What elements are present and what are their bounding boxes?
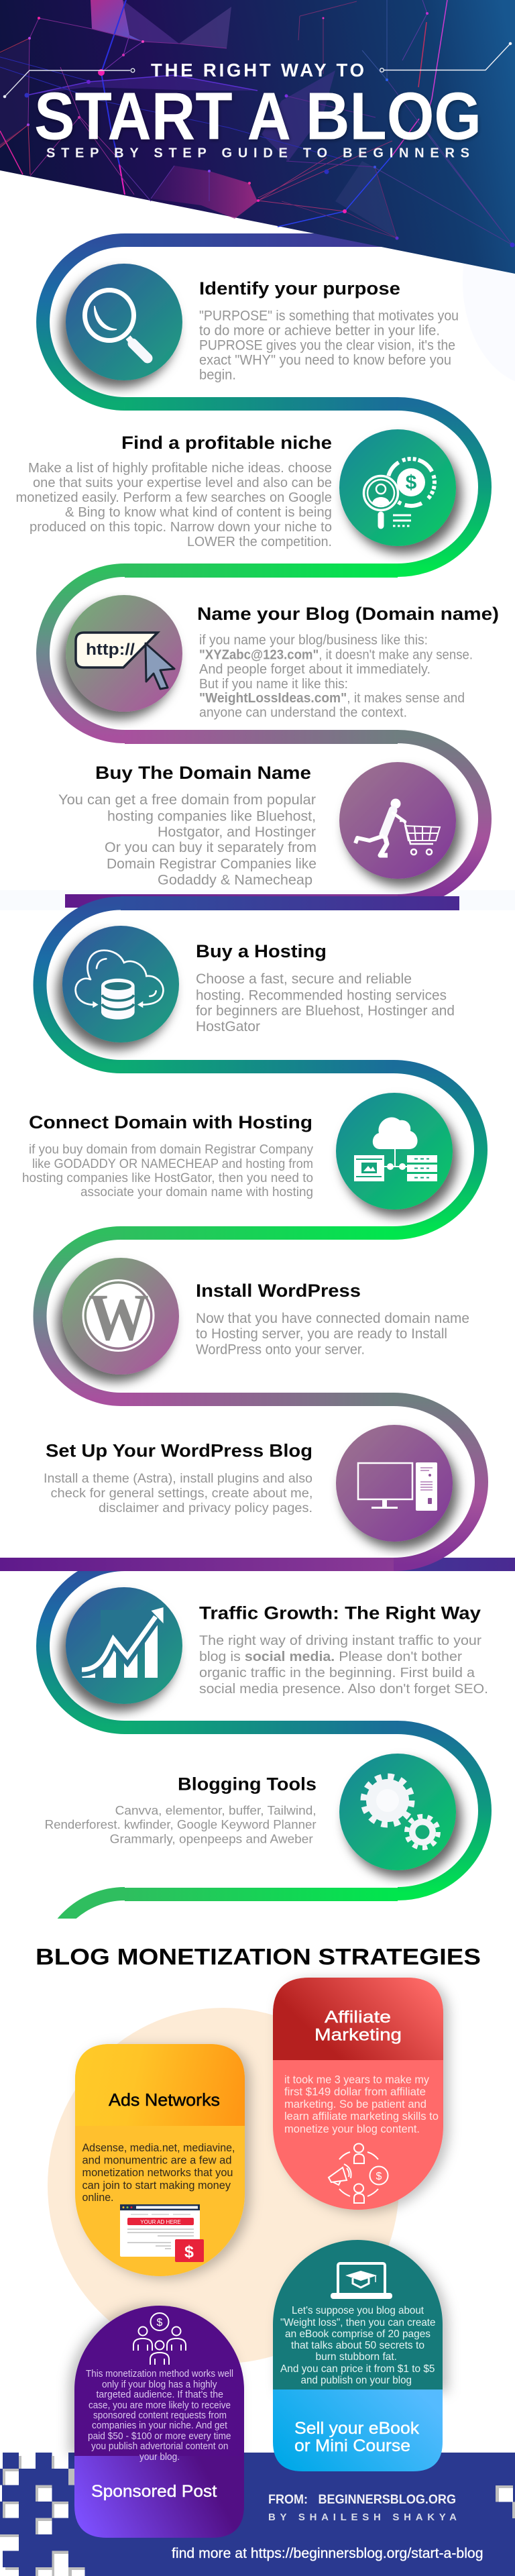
card text: that talks about 50 secrets to xyxy=(291,2340,424,2351)
card: sponsored post xyxy=(74,2306,244,2538)
icon: cloud database xyxy=(62,926,179,1042)
step 4: buy the domain name xyxy=(58,762,456,888)
timeline path: section three xyxy=(36,1558,515,1919)
heading: Find a profitable niche xyxy=(121,433,332,453)
step 1: identify your purpose xyxy=(66,264,459,382)
body text xyxy=(199,309,459,382)
body text: "WeightLossIdeas.com", it makes sense and xyxy=(199,691,465,706)
body text xyxy=(22,1143,313,1199)
body text: PUPROSE gives you the clear vision, it's the xyxy=(199,338,455,353)
icon: web ad xyxy=(120,2204,204,2262)
card title: Affiliate xyxy=(325,2008,391,2027)
heading: Blogging Tools xyxy=(178,1774,317,1794)
step 5: buy a hosting xyxy=(62,926,455,1042)
body text: Canvva, elementor, buffer, Tailwind, xyxy=(115,1804,317,1817)
icon: sponsored people xyxy=(133,2313,186,2365)
icon: laptop course xyxy=(331,2263,392,2299)
pixel pattern xyxy=(0,2469,515,2576)
body text: to do more or achieve better in your life. xyxy=(199,323,440,338)
card text: monetize your blog content. xyxy=(284,2123,420,2135)
network polygons xyxy=(0,0,397,238)
icon: sponsored people: $ xyxy=(157,2317,163,2328)
footer credit xyxy=(268,2493,457,2523)
card text: your blog. xyxy=(139,2451,180,2463)
footer link: find more at https://beginnersblog.org/start-a-blog xyxy=(172,2546,483,2561)
icon: growth chart xyxy=(66,1587,182,1704)
body text xyxy=(199,633,473,720)
card text: targeted audience. If that's the xyxy=(97,2389,223,2400)
heading: Set Up Your WordPress Blog xyxy=(46,1441,312,1461)
body text: begin. xyxy=(199,368,236,382)
subtitle: STEP BY STEP GUIDE TO BEGINNERS xyxy=(46,146,469,161)
card text: burn stubborn fat. xyxy=(315,2351,397,2363)
body text: hosting. Recommended hosting services xyxy=(196,987,447,1004)
step 9: traffic growth xyxy=(66,1587,488,1704)
body text xyxy=(58,792,317,888)
step 2: find a profitable niche xyxy=(16,429,456,549)
heading: Identify your purpose xyxy=(199,278,400,299)
heading: Traffic Growth: The Right Way xyxy=(199,1603,481,1623)
card text: it took me 3 years to make my xyxy=(284,2073,429,2086)
body text: if you buy domain from domain Registrar Company xyxy=(29,1143,313,1157)
body text: associate your domain name with hosting xyxy=(80,1185,313,1199)
heading: Connect Domain with Hosting xyxy=(29,1112,312,1132)
timeline path: section two xyxy=(0,896,481,1571)
body text: WordPress onto your server. xyxy=(196,1342,365,1358)
footer credit: FROM: xyxy=(268,2493,308,2507)
network lines xyxy=(0,0,512,245)
card text xyxy=(86,2368,233,2463)
card text xyxy=(82,2141,235,2204)
icon: url and cursor xyxy=(66,595,182,712)
title line one: THE RIGHT WAY TO xyxy=(151,60,364,80)
icon: affiliate cycle: $ xyxy=(376,2171,382,2182)
card text: and publish on your blog xyxy=(300,2375,412,2386)
body text: Godaddy & Namecheap xyxy=(158,872,312,888)
footer band xyxy=(0,2453,515,2576)
card text: only if your blog has a highly xyxy=(102,2379,217,2390)
body text: The right way of driving instant traffic to your xyxy=(199,1633,481,1648)
body text xyxy=(196,1311,469,1358)
body text: Now that you have connected domain name xyxy=(196,1311,469,1326)
card text xyxy=(280,2305,436,2386)
card text: online. xyxy=(82,2191,114,2204)
heading: Name your Blog (Domain name) xyxy=(197,604,499,624)
step 3: name your blog xyxy=(66,595,499,720)
icon: wordpress logo: W xyxy=(89,1280,149,1354)
body text xyxy=(199,1633,488,1697)
body text: monetized easily. Perform a few searches on Google xyxy=(16,490,332,505)
icon: web ad: YOUR AD HERE xyxy=(140,2219,181,2225)
icon: magnifier xyxy=(66,264,182,380)
card title: Sell your eBook xyxy=(294,2419,420,2438)
body text: And people forget about it immediately. xyxy=(199,662,431,677)
card text: learn affiliate marketing skills to xyxy=(284,2110,439,2123)
body text: You can get a free domain from popular xyxy=(58,792,316,808)
card text: and monumentric are a few ad xyxy=(82,2153,232,2167)
body text: exact "WHY" you need to know before you xyxy=(199,353,451,368)
cream blob xyxy=(48,2008,399,2363)
heading: Buy The Domain Name xyxy=(95,763,311,783)
monetization heading: BLOG MONETIZATION STRATEGIES xyxy=(36,1944,481,1970)
body text: Install a theme (Astra), install plugins and also xyxy=(44,1472,312,1486)
network nodes xyxy=(24,12,515,247)
body text: if you name your blog/business like this: xyxy=(199,633,428,648)
card text: sponsored content requests from xyxy=(93,2410,227,2421)
icon: gears xyxy=(339,1754,456,1870)
step 7: install wordpress xyxy=(62,1258,469,1375)
body text xyxy=(44,1472,313,1515)
card: sell your ebook xyxy=(273,2240,443,2471)
body text: Domain Registrar Companies like xyxy=(107,856,317,872)
body text: But if you name it like this: xyxy=(199,677,348,692)
card: sell your ebook: or Mini Course xyxy=(294,2436,410,2455)
body text: organic traffic in the beginning. First build a xyxy=(199,1665,475,1680)
card title: Sponsored Post xyxy=(91,2482,217,2501)
body text: anyone can understand the context. xyxy=(199,706,407,720)
faint corner shape xyxy=(463,178,515,386)
step 8: set up your wordpress blog xyxy=(44,1425,453,1542)
body text: hosting companies like Bluehost, xyxy=(107,809,316,824)
card: affiliate marketing: Marketing xyxy=(314,2026,402,2045)
card text: case, you are more likely to receive xyxy=(89,2400,231,2411)
heading: Buy a Hosting xyxy=(196,941,327,961)
body text: Make a list of highly profitable niche ideas. choose xyxy=(28,460,332,476)
card text xyxy=(284,2073,439,2135)
body text: blog is social media. Please don't bother xyxy=(199,1649,462,1664)
circuit line right xyxy=(380,42,512,72)
body text: LOWER the competition. xyxy=(187,534,332,549)
footer credit: BEGINNERSBLOG.ORG xyxy=(318,2493,456,2507)
body text xyxy=(45,1804,317,1846)
body text: HostGator xyxy=(196,1019,260,1034)
card text: an eBook comprise of 20 pages xyxy=(285,2328,431,2340)
card: affiliate marketing xyxy=(273,1978,443,2210)
step 10: blogging tools xyxy=(45,1754,456,1870)
body text: one that suits your expertise level and also can be xyxy=(33,475,332,490)
card text: can join to start making money xyxy=(82,2179,231,2192)
body text: "PURPOSE" is something that motivates you xyxy=(199,309,459,323)
icon: wordpress logo xyxy=(62,1258,179,1375)
body text: social media presence. Also don't forget SEO. xyxy=(199,1681,488,1697)
circuit line left xyxy=(3,68,135,98)
body text: disclaimer and privacy policy pages. xyxy=(99,1501,312,1515)
body text: "XYZabc@123.com", it doesn't make any sense. xyxy=(199,648,473,663)
icon: profit search xyxy=(339,429,456,546)
body text xyxy=(16,460,332,549)
footer credit: BY SHAILESH SHAKYA xyxy=(268,2512,457,2523)
body text: hosting companies like HostGator, then you need to xyxy=(22,1171,313,1185)
body text: like GODADDY OR NAMECHEAP and hosting from xyxy=(32,1157,313,1171)
body text: Or you can buy it separately from xyxy=(105,840,317,855)
step 6: connect domain with hosting xyxy=(22,1093,453,1210)
icon: affiliate cycle xyxy=(329,2144,388,2203)
body text: Choose a fast, secure and reliable xyxy=(196,971,412,987)
icon: url and cursor: http:// xyxy=(86,641,135,659)
card: ads networks xyxy=(75,2044,245,2276)
body text: for beginners are Bluehost, Hostinger and xyxy=(196,1004,455,1018)
heading: Install WordPress xyxy=(196,1281,361,1301)
card text: Adsense, media.net, mediavine, xyxy=(82,2141,235,2154)
body text: Renderforest. kwfinder, Google Keyword Planner xyxy=(45,1818,317,1831)
header banner xyxy=(0,0,515,274)
icon: cloud server xyxy=(336,1093,453,1210)
card text: "Weight loss", then you can create xyxy=(280,2317,436,2328)
body text: check for general settings, create about me, xyxy=(51,1487,313,1501)
card text: And you can price it from $1 to $5 xyxy=(280,2363,435,2375)
icon: desktop computer xyxy=(336,1425,453,1542)
body text: Grammarly, openpeeps and Aweber xyxy=(110,1833,313,1846)
timeline path: section one xyxy=(43,233,515,908)
card text: Let's suppose you blog about xyxy=(292,2305,424,2316)
icon: web ad: $ xyxy=(184,2243,194,2261)
card title: Ads Networks xyxy=(109,2090,220,2110)
card text: marketing. So be patient and xyxy=(284,2098,426,2110)
card text: monetization networks that you xyxy=(82,2166,233,2179)
card text: This monetization method works well xyxy=(86,2368,233,2379)
card text: you publish advertorial content on xyxy=(91,2440,228,2452)
body text: Hostgator, and Hostinger xyxy=(158,824,316,840)
icon: shopper with cart xyxy=(339,762,456,879)
icon: profit search: $ xyxy=(406,472,417,494)
title line two: START A BLOG xyxy=(34,79,481,154)
body text: to Hosting server, you are ready to Install xyxy=(196,1326,447,1342)
body text xyxy=(196,971,455,1034)
card text: companies in your niche. And get xyxy=(92,2420,228,2431)
body text: & Bing to know what kind of content is being xyxy=(65,504,332,520)
faint band xyxy=(0,890,515,910)
body text: produced on this topic. Narrow down your niche to xyxy=(30,519,332,535)
card text: first $149 dollar from affiliate xyxy=(284,2085,426,2098)
card text: paid $50 - $100 or more every time xyxy=(88,2430,231,2442)
